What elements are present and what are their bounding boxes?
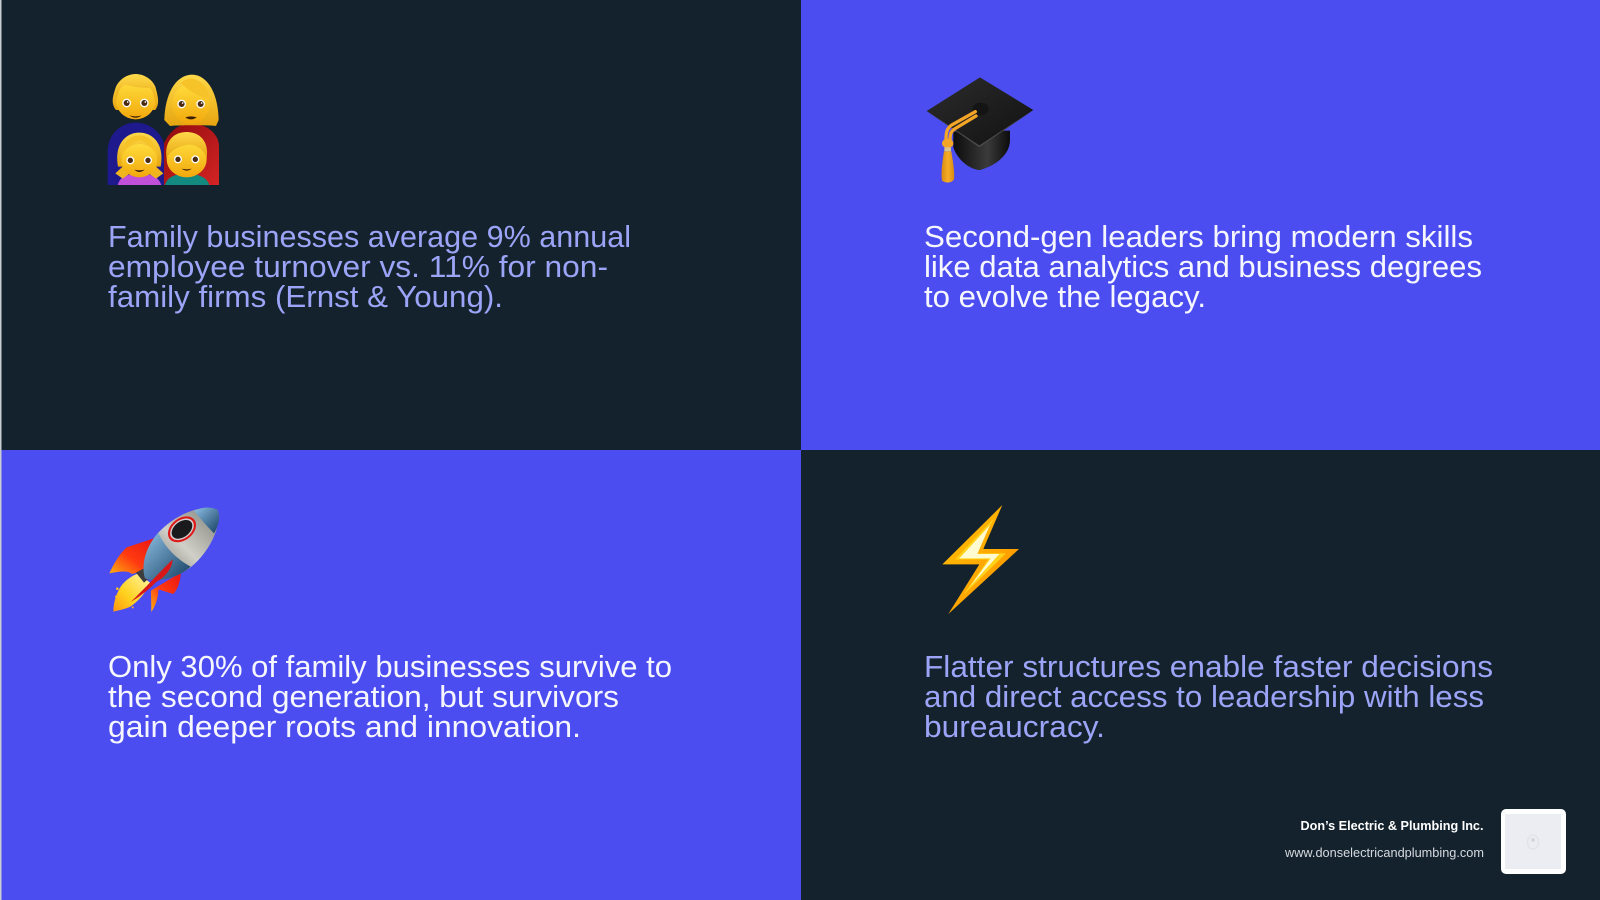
text: family turnover: family firms (Ernst & Young). [108,279,503,314]
text: flatter structures: Flatter structures enable faster decisions [924,649,1493,684]
icon: graduation cap [927,77,1033,183]
logo box [1501,809,1566,874]
text: flatter structures: and direct access to leadership with less [924,679,1484,714]
footer: company name and website [1284,818,1484,860]
text: family turnover: Family businesses average 9% annual [108,219,631,254]
icon: family [108,74,219,185]
text: flatter structures: bureaucracy. [924,709,1105,744]
text: survival rate: Only 30% of family businesses survive to [108,649,672,684]
text: survival rate: the second generation, but survivors [108,679,619,714]
icon: rocket [109,508,219,612]
icon: lightning bolt [942,505,1019,614]
footer: company name and website: Don’s Electric & Plumbing Inc. [1300,818,1484,833]
panel: family turnover [0,0,801,450]
text: survival rate: gain deeper roots and innovation. [108,709,581,744]
panel: flatter structures [802,450,1600,900]
footer: company name and website: www.donselectricandplumbing.com [1284,846,1484,860]
panel: survival rate [0,450,801,900]
text: second-gen leaders: to evolve the legacy. [924,279,1206,314]
panel: second-gen leaders [801,0,1600,450]
text: family turnover: employee turnover vs. 11% for non- [108,249,608,284]
text: second-gen leaders: like data analytics and business degrees [924,249,1482,284]
text: second-gen leaders: Second-gen leaders bring modern skills [924,219,1473,254]
